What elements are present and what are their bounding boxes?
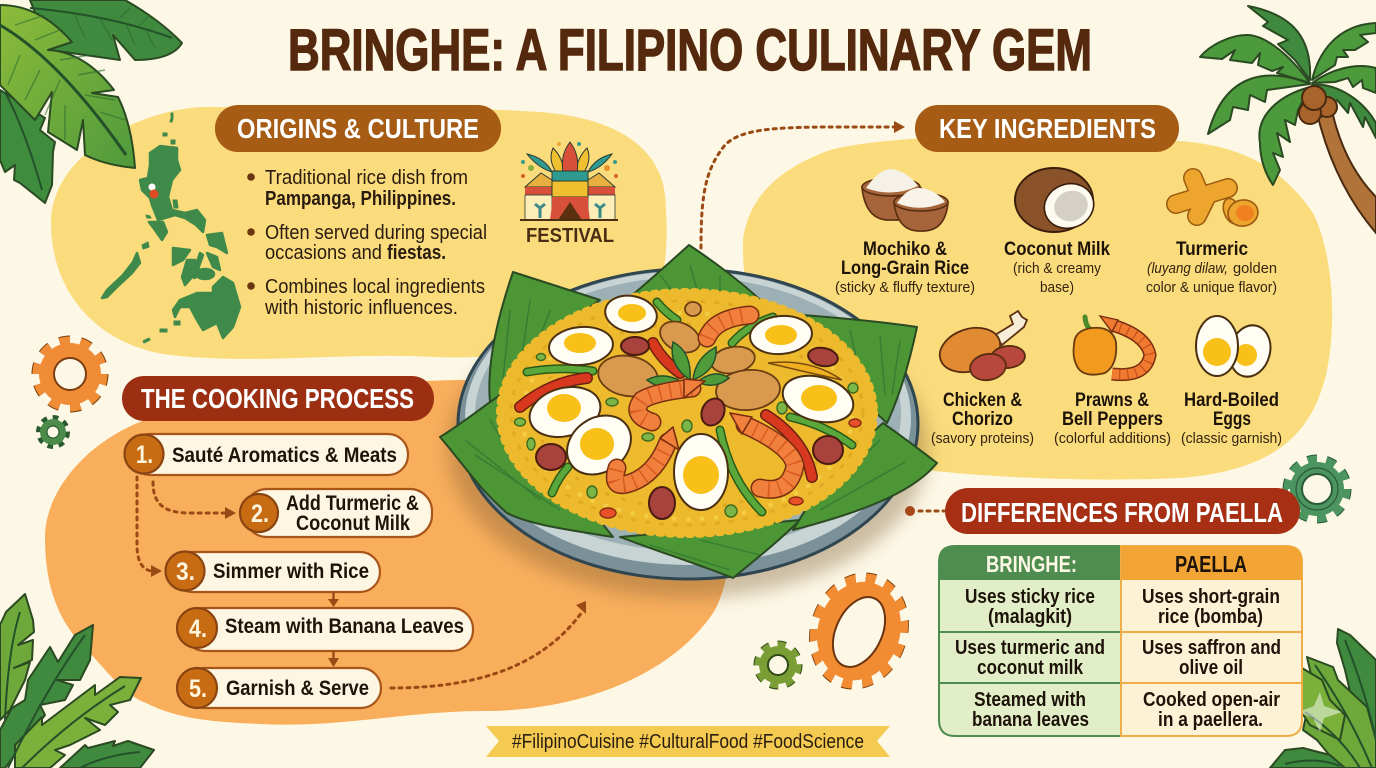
sausages bbox=[536, 337, 843, 519]
ingredient: mochiko and rice: (sticky & fluffy texture) bbox=[835, 279, 975, 296]
ingredient: turmeric: (luyang dilaw, bbox=[1147, 260, 1228, 277]
ingredient: prawns and bell peppers: Bell Peppers bbox=[1062, 408, 1163, 430]
plate shadow bbox=[448, 298, 928, 598]
lower dark leaf bbox=[0, 90, 55, 203]
leaf veins bbox=[465, 265, 905, 570]
column: paella: PAELLA bbox=[1175, 551, 1247, 577]
arrow: step 5 to dish bbox=[391, 601, 586, 688]
small islands bbox=[142, 113, 180, 343]
ingredient: prawns and bell peppers: Prawns & bbox=[1075, 389, 1149, 411]
column: paella: Cooked open-air bbox=[1143, 688, 1280, 711]
column: bringhe: Uses sticky rice bbox=[965, 585, 1095, 608]
ingredient: hard-boiled eggs: (classic garnish) bbox=[1181, 430, 1282, 447]
icon: pepper and prawn bbox=[1074, 316, 1150, 375]
column: bringhe bbox=[939, 546, 1121, 736]
illustration: bringhe dish on plate bbox=[440, 245, 937, 598]
comparison table bbox=[939, 546, 1302, 736]
people bbox=[535, 204, 605, 218]
Palawan bbox=[102, 253, 140, 298]
eggs bbox=[524, 292, 858, 510]
ingredient: turmeric: Turmeric bbox=[1176, 238, 1248, 260]
icon: bottom-right palm leaves bbox=[1270, 629, 1376, 768]
hashtag ribbon: #FilipinoCuisine #CulturalFood #FoodScience bbox=[512, 731, 864, 753]
ingredient: mochiko and rice: Mochiko & bbox=[863, 238, 947, 260]
icon: green gear right bbox=[1288, 460, 1346, 518]
peas and red bits bbox=[514, 354, 861, 518]
bullet 2 bbox=[247, 222, 487, 264]
ingredient: hard-boiled eggs: Eggs bbox=[1213, 408, 1251, 430]
step 1: Sauté Aromatics & Meats bbox=[172, 444, 397, 467]
column: bringhe: coconut milk bbox=[977, 656, 1083, 679]
red peppers bbox=[520, 343, 812, 477]
yellow pepper bbox=[768, 362, 842, 380]
Mindanao bbox=[173, 277, 240, 338]
ingredient: mochiko and rice: Long-Grain Rice bbox=[841, 257, 969, 279]
bullet 1: Pampanga, Philippines. bbox=[265, 188, 456, 210]
ingredient: chicken and chorizo bbox=[931, 311, 1034, 447]
bullet 2: occasions and bbox=[265, 242, 382, 264]
arrow: step 4 to step 5 bbox=[328, 651, 339, 667]
step 3 bbox=[166, 552, 380, 592]
icon: halved eggs bbox=[1196, 316, 1276, 381]
bullet 3: Combines local ingredients bbox=[265, 276, 485, 298]
column: bringhe: Steamed with bbox=[974, 688, 1086, 711]
column: bringhe: BRINGHE: bbox=[986, 551, 1077, 577]
icon: top-right coconut palm bbox=[1200, 6, 1376, 233]
icon: orange gear top-left bbox=[37, 341, 103, 407]
Visayas islands bbox=[173, 233, 227, 285]
Mindoro bbox=[149, 222, 167, 240]
arrow: dotted arrow to key ingredients bbox=[701, 121, 905, 248]
Bohol bbox=[196, 269, 214, 279]
icon: small olive gear bbox=[758, 645, 798, 685]
ingredient: turmeric bbox=[1146, 178, 1277, 296]
bullet 2: Often served during special bbox=[265, 222, 487, 244]
palm fronds bbox=[1200, 6, 1376, 185]
step 2: Add Turmeric & bbox=[286, 492, 419, 515]
step 3: 3. bbox=[176, 558, 195, 586]
palm trunk bbox=[1318, 115, 1376, 233]
heading: differences from paella: DIFFERENCES FROM PAELLA bbox=[961, 497, 1283, 528]
panel: ingredients background blob bbox=[743, 135, 1332, 480]
icon: bottom-left palm leaves bbox=[0, 594, 154, 768]
shrimp heads bbox=[660, 379, 752, 450]
festival dots bbox=[521, 142, 618, 178]
herb garnish bbox=[647, 342, 729, 387]
column: paella: Uses short-grain bbox=[1142, 585, 1280, 608]
coconuts bbox=[1299, 86, 1337, 124]
ingredient: turmeric: color & unique flavor) bbox=[1146, 279, 1277, 296]
ingredient: coconut milk: base) bbox=[1040, 279, 1074, 296]
step 4 bbox=[177, 608, 473, 651]
sparkle mark bbox=[1298, 692, 1342, 732]
icon: coconut bbox=[1015, 168, 1100, 235]
step 5: Garnish & Serve bbox=[226, 677, 369, 700]
step 1 bbox=[124, 434, 408, 475]
step 3: Simmer with Rice bbox=[213, 560, 369, 583]
icon: Philippines map bbox=[102, 113, 240, 343]
panel: cooking steps bbox=[124, 434, 473, 708]
bullet 1: Traditional rice dish from bbox=[265, 167, 468, 189]
rice mound bbox=[500, 292, 874, 534]
ingredient: prawns and bell peppers: (colorful additions) bbox=[1054, 430, 1171, 447]
green beans bbox=[527, 302, 852, 512]
step 5: 5. bbox=[189, 675, 207, 703]
ingredient: coconut milk bbox=[1004, 168, 1110, 296]
arrow: dish to differences bbox=[905, 506, 944, 516]
arrow: step 3 to step 4 bbox=[328, 592, 339, 607]
icon: chicken leg and chorizo bbox=[934, 311, 1027, 383]
shrimp bbox=[615, 315, 795, 489]
column: paella: Uses saffron and bbox=[1142, 636, 1281, 659]
Luzon bbox=[140, 146, 205, 232]
Pampanga marker bbox=[148, 184, 158, 198]
step 5 bbox=[177, 668, 381, 708]
panel: origins background blob bbox=[51, 107, 667, 359]
plate bbox=[458, 269, 918, 579]
icon: festival bbox=[520, 142, 618, 247]
ingredient: mochiko and rice bbox=[835, 169, 975, 296]
ingredient: chicken and chorizo: Chicken & bbox=[943, 389, 1022, 411]
heading: origins and culture bbox=[215, 105, 501, 152]
arrow: step 1 to step 3 bbox=[137, 477, 162, 577]
icon: turmeric root bbox=[1176, 178, 1260, 228]
chicken pieces bbox=[595, 302, 782, 413]
step 2: 2. bbox=[251, 500, 269, 528]
ingredient: coconut milk: (rich & creamy bbox=[1013, 260, 1101, 277]
title: BRINGHE: A FILIPINO CULINARY GEM bbox=[288, 18, 1092, 83]
ingredient: hard-boiled eggs: Hard-Boiled bbox=[1184, 389, 1279, 411]
ingredient: coconut milk: Coconut Milk bbox=[1004, 238, 1110, 260]
side tents bbox=[525, 173, 615, 187]
festival label: FESTIVAL bbox=[526, 225, 614, 247]
main light leaf bbox=[0, 5, 135, 168]
back dark leaf bbox=[30, 0, 182, 60]
heading: key ingredients bbox=[915, 105, 1179, 152]
heading: origins and culture: ORIGINS & CULTURE bbox=[237, 113, 479, 144]
bullet 3: with historic influences. bbox=[264, 297, 458, 319]
column: bringhe: Uses turmeric and bbox=[955, 636, 1105, 659]
bullet 2: fiestas. bbox=[387, 242, 446, 264]
ingredient: chicken and chorizo: (savory proteins) bbox=[931, 430, 1034, 447]
ingredient: chicken and chorizo: Chorizo bbox=[952, 408, 1013, 430]
icon: green gear left bbox=[39, 418, 67, 446]
heading: key ingredients: KEY INGREDIENTS bbox=[939, 113, 1156, 144]
icon: rice bowls bbox=[862, 169, 948, 231]
panel: key ingredients bbox=[835, 168, 1282, 447]
step 4: Steam with Banana Leaves bbox=[225, 615, 464, 638]
panel: cooking process background blob bbox=[45, 380, 729, 725]
column: paella: olive oil bbox=[1179, 656, 1243, 679]
icon: large orange gear bbox=[802, 568, 916, 694]
banana leaves bbox=[440, 245, 937, 578]
step 2 bbox=[240, 489, 432, 537]
column: paella: rice (bomba) bbox=[1158, 605, 1263, 628]
column: paella: in a paellera. bbox=[1158, 708, 1263, 731]
bullet 3 bbox=[247, 276, 485, 319]
icon: top-left palm leaves bbox=[0, 0, 182, 203]
arrow: step 1 to step 2 bbox=[153, 482, 236, 519]
heading: the cooking process: THE COOKING PROCESS bbox=[141, 383, 414, 414]
ground line bbox=[520, 219, 618, 221]
heading: differences from paella bbox=[945, 488, 1300, 534]
central tower bbox=[552, 171, 588, 181]
ingredient: hard-boiled eggs bbox=[1181, 316, 1282, 447]
ingredient: prawns and bell peppers bbox=[1054, 316, 1171, 447]
step 1: 1. bbox=[136, 441, 153, 469]
column: bringhe: banana leaves bbox=[972, 708, 1089, 731]
text block: origins bullets bbox=[247, 167, 487, 319]
step 2: Coconut Milk bbox=[296, 512, 410, 535]
heading: the cooking process bbox=[122, 376, 434, 421]
column: paella bbox=[1121, 546, 1302, 736]
bullet 1 bbox=[247, 167, 468, 210]
feathers bbox=[527, 154, 612, 172]
step 4: 4. bbox=[189, 615, 207, 643]
ingredient: turmeric: golden bbox=[1233, 260, 1277, 277]
column: bringhe: (malagkit) bbox=[988, 605, 1072, 628]
hashtag ribbon bbox=[486, 726, 890, 757]
